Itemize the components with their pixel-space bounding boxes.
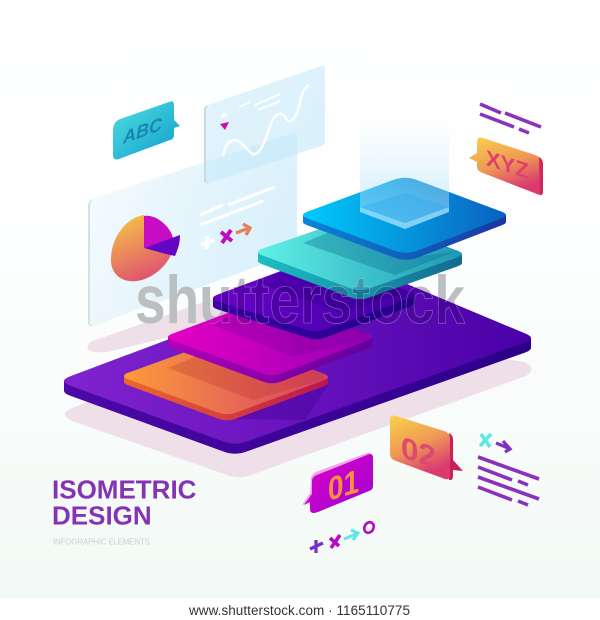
- subtitle: INFOGRAPHIC ELEMENTS: [53, 538, 150, 546]
- title: [52, 474, 197, 530]
- plate: dark purple: [213, 261, 415, 339]
- wave line: [223, 86, 308, 155]
- symbols: plus, cross, arrow: [201, 224, 250, 249]
- bubble: 01: [302, 453, 373, 513]
- pie chart: [111, 215, 180, 281]
- plate: magenta: [168, 300, 372, 383]
- footer: www.shutterstock.com · 1165110775: [188, 603, 410, 618]
- bubble: 01: 01: [328, 462, 359, 509]
- symbols row below 01: [310, 520, 376, 553]
- bubble: XYZ: [469, 138, 543, 195]
- bubble: 02: [390, 416, 463, 480]
- watermark (light layer): shutterstock: [135, 262, 465, 338]
- bubble: ABC: ABC: [122, 113, 163, 148]
- cast shadow: [303, 233, 457, 275]
- plate: teal: [258, 217, 462, 299]
- symbols: cross and arrow beside 02: [480, 434, 510, 452]
- glass box: [360, 123, 449, 229]
- bubble: ABC: [113, 101, 180, 160]
- plate: base purple: [64, 268, 531, 454]
- text lines: [200, 187, 275, 225]
- title: ISOMETRIC: [52, 474, 197, 504]
- cast shadow: [213, 300, 370, 357]
- text lines beside 02: [478, 457, 539, 505]
- plate: blue: [303, 178, 506, 260]
- cast shadow: [168, 341, 325, 400]
- bubble: 02: 02: [401, 430, 436, 475]
- panel: pie chart glass card: [88, 133, 297, 326]
- panel: line chart glass card: [204, 66, 325, 183]
- plate ground shadows: [65, 268, 532, 478]
- marker triangles: [220, 112, 229, 130]
- plate: orange: [124, 339, 328, 420]
- watermark (overlay on plates): shutterstock: [135, 262, 465, 338]
- chart caption lines: [239, 94, 280, 110]
- cast shadow: [232, 385, 328, 420]
- bubble: XYZ: XYZ: [486, 146, 529, 184]
- title: DESIGN: [52, 500, 152, 530]
- cast shadow: [258, 261, 410, 313]
- top right text lines: [480, 104, 541, 133]
